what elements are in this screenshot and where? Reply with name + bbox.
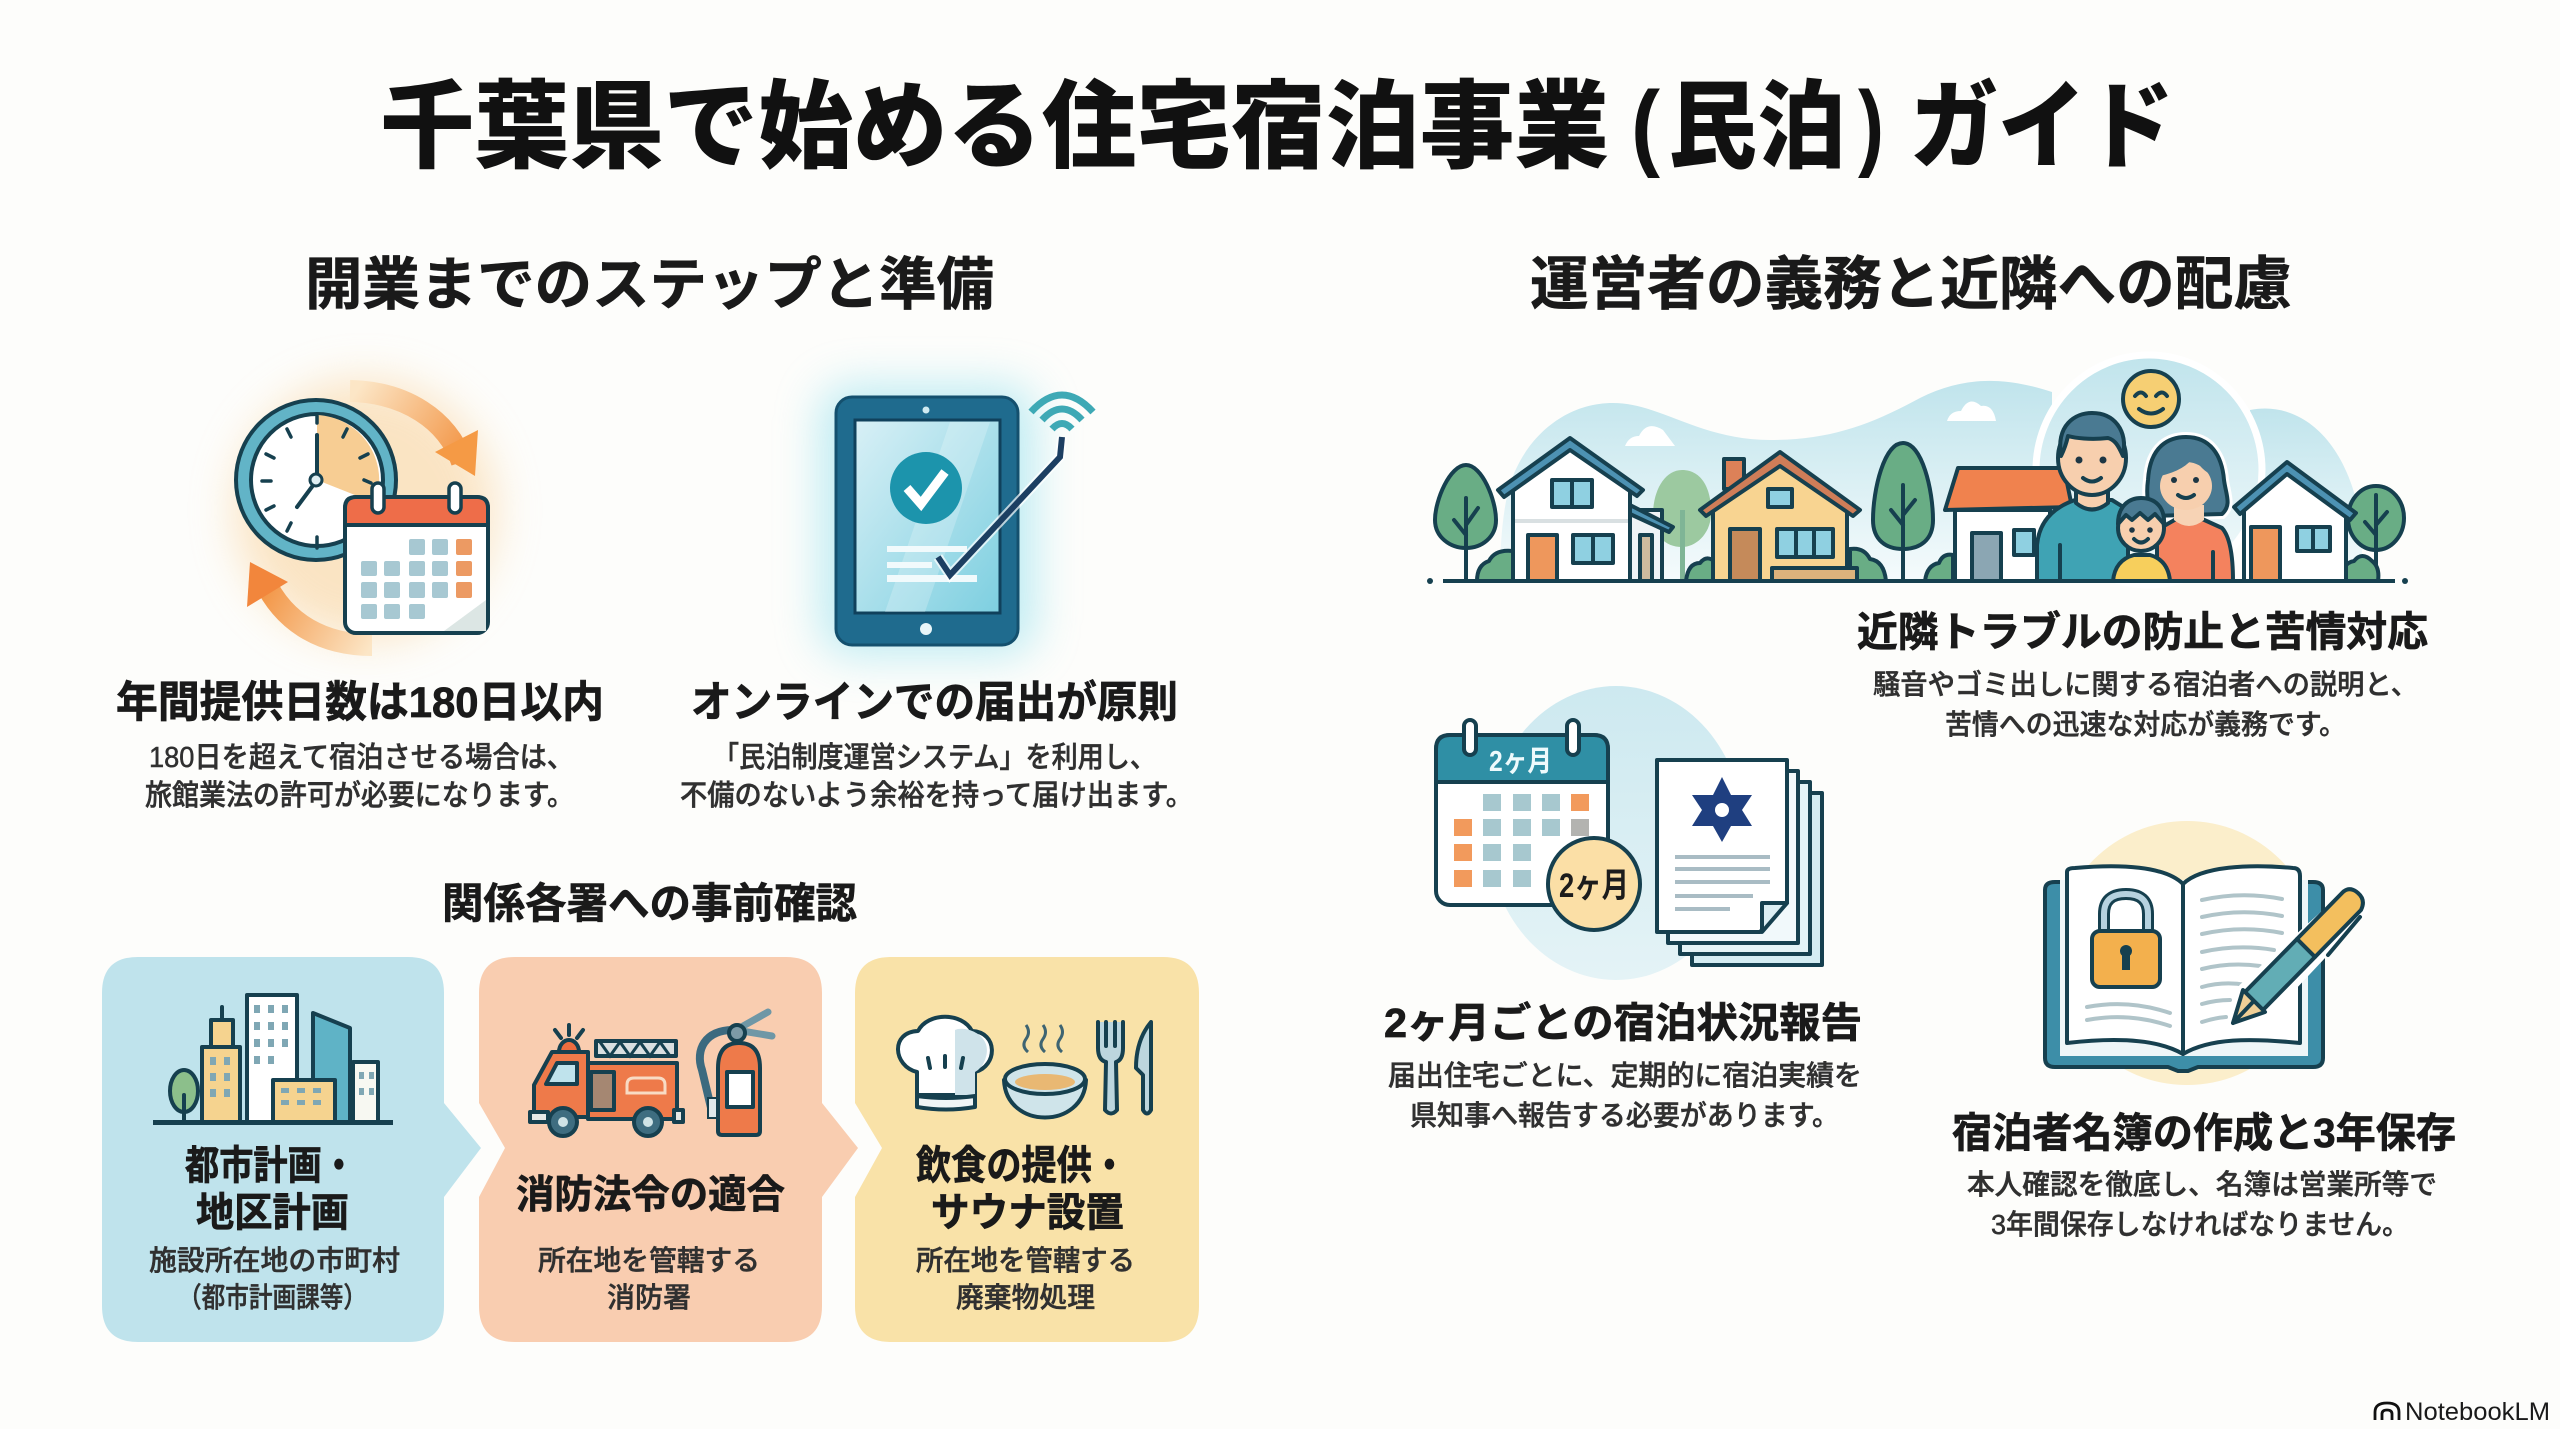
panel description: 消防署 (607, 1282, 691, 1313)
title: 千葉県で始める住宅宿泊事業 (380, 74, 1609, 181)
text: annual limit (116, 679, 604, 812)
panel description: 廃棄物処理 (956, 1282, 1095, 1313)
item description: 騒音やゴミ出しに関する宿泊者への説明と、 (1873, 669, 2418, 700)
item heading: 近隣トラブルの防止と苦情対応 (1857, 609, 2428, 655)
text: neighbour trouble prevention (1857, 609, 2428, 740)
clouds (1625, 402, 1996, 446)
panel heading: 飲食の提供・ (916, 1144, 1127, 1188)
panel description: 施設所在地の市町村 (149, 1245, 400, 1276)
panel heading: 地区計画 (196, 1191, 349, 1235)
heading: steps and preparation: 開業までのステップと準備 (305, 253, 994, 317)
people: man (2037, 413, 2128, 581)
text: two-monthly report (1384, 1000, 1862, 1131)
text: guest register (1952, 1110, 2456, 1240)
badge: two months: 2ヶ月 (1559, 867, 1629, 905)
panel description: 所在地を管轄する (538, 1245, 760, 1276)
item description: 旅館業法の許可が必要になります。 (145, 779, 574, 812)
panel heading: 消防法令の適合 (516, 1174, 785, 1217)
document stack (1657, 760, 1822, 965)
ground line (1443, 579, 2395, 583)
panel: city planning (102, 957, 481, 1342)
item description: 届出住宅ごとに、定期的に宿泊実績を (1388, 1060, 1862, 1091)
icon: guest register book and pen (2045, 821, 2364, 1085)
calendar: 2ヶ月 (1489, 746, 1552, 778)
trees (1435, 443, 2404, 581)
text: online filing (680, 679, 1193, 812)
pen (2233, 889, 2364, 1023)
heading: operator duties: 運営者の義務と近隣への配慮 (1530, 252, 2292, 317)
item description: 苦情への迅速な対応が義務です。 (1945, 709, 2346, 740)
icon: fire extinguisher (700, 1012, 772, 1135)
panel description: 所在地を管轄する (916, 1245, 1135, 1276)
title: ガイド (1910, 74, 2174, 181)
title: ( (1631, 72, 1660, 179)
item heading: 年間提供日数は180日以内 (116, 679, 604, 727)
people: woman (2147, 437, 2233, 581)
icon: chef hat (898, 1017, 992, 1110)
heading: prior confirmation: 関係各署への事前確認 (442, 880, 857, 927)
icon: calendar and report documents (1436, 686, 1822, 980)
padlock (2092, 894, 2160, 987)
item description: 3年間保存しなければなりません。 (1991, 1209, 2409, 1240)
item description: 本人確認を徹底し、名簿は営業所等で (1967, 1169, 2437, 1200)
icon: clock and calendar (235, 380, 495, 645)
panel heading: 都市計画・ (185, 1144, 356, 1188)
title: ) (1858, 72, 1884, 179)
logo: NotebookLM: NotebookLM (2405, 1398, 2550, 1426)
icon: fire truck (530, 1025, 683, 1136)
panel description: （都市計画課等） (178, 1282, 367, 1313)
panel: food and sauna (855, 957, 1199, 1342)
title: 民泊 (1668, 74, 1846, 181)
item description: 県知事へ報告する必要があります。 (1410, 1100, 1839, 1131)
house: orange roof (1945, 468, 2072, 581)
calendar (1436, 720, 1608, 905)
people: child (2113, 498, 2170, 581)
icon: tablet with check (820, 385, 1093, 655)
badge: two months (1548, 838, 1640, 930)
smiling sun face (2123, 371, 2179, 427)
item description: 180日を超えて宿泊させる場合は、 (149, 741, 574, 774)
house: yellow (1700, 452, 1860, 581)
house: right (2234, 462, 2356, 581)
item heading: オンラインでの届出が原則 (691, 679, 1178, 727)
icon: bowl (1004, 1025, 1086, 1118)
panel: fire law (479, 957, 858, 1342)
panel heading: サウナ設置 (931, 1191, 1124, 1235)
item heading: 宿泊者名簿の作成と3年保存 (1952, 1110, 2456, 1156)
bushes (1477, 549, 2378, 581)
icon: city buildings (153, 995, 393, 1125)
house: white (1498, 438, 1673, 581)
illustration: neighbourhood (1427, 355, 2408, 585)
item description: 「民泊制度運営システム」を利用し、 (713, 741, 1156, 774)
item heading: 2ヶ月ごとの宿泊状況報告 (1384, 1000, 1862, 1046)
icon: fork and knife (1098, 1022, 1151, 1114)
item description: 不備のないよう余裕を持って届け出ます。 (680, 779, 1193, 812)
